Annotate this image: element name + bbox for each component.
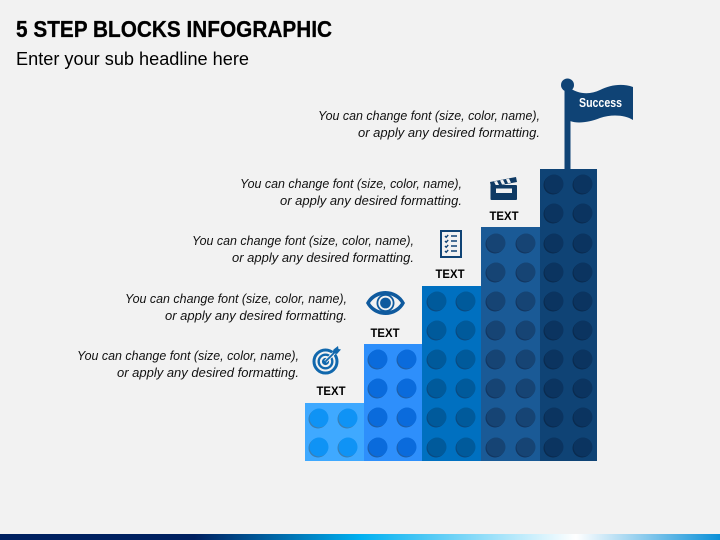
icon: target (314, 346, 341, 373)
text block 1: or apply any desired formatting. (117, 366, 299, 380)
text block 1 (77, 349, 299, 380)
text block 4: or apply any desired formatting. (280, 194, 462, 208)
text block 4 (240, 177, 462, 208)
text block 3 (192, 234, 414, 265)
bottom gradient bar (0, 534, 720, 540)
text block 5: You can change font (size, color, name), (318, 109, 540, 123)
text block 3: You can change font (size, color, name), (192, 234, 414, 248)
block column 5 (540, 169, 597, 461)
flag label: Success (579, 95, 622, 110)
block column 2 (364, 344, 422, 461)
label: text 3: TEXT (436, 267, 465, 281)
block column 4 (481, 227, 540, 461)
text block 2: or apply any desired formatting. (165, 309, 347, 323)
title: 5 STEP BLOCKS INFOGRAPHIC (16, 16, 332, 42)
text block 5: or apply any desired formatting. (358, 126, 540, 140)
label: text 2: TEXT (370, 326, 400, 340)
text block 5 (318, 109, 540, 140)
label: text 1: TEXT (316, 384, 346, 398)
flag: success (561, 78, 633, 170)
block column 1 (305, 403, 364, 461)
icon: checklist (441, 231, 461, 257)
label: text 4: TEXT (490, 209, 519, 223)
text block 4: You can change font (size, color, name), (240, 177, 462, 191)
text block 2 (125, 292, 347, 323)
subtitle: Enter your sub headline here (16, 49, 249, 69)
text block 2: You can change font (size, color, name), (125, 292, 347, 306)
text block 1: You can change font (size, color, name), (77, 349, 299, 363)
text block 3: or apply any desired formatting. (232, 251, 414, 265)
icon: clapperboard (490, 177, 517, 200)
block column 3 (422, 286, 481, 461)
icon: eye (366, 291, 405, 315)
